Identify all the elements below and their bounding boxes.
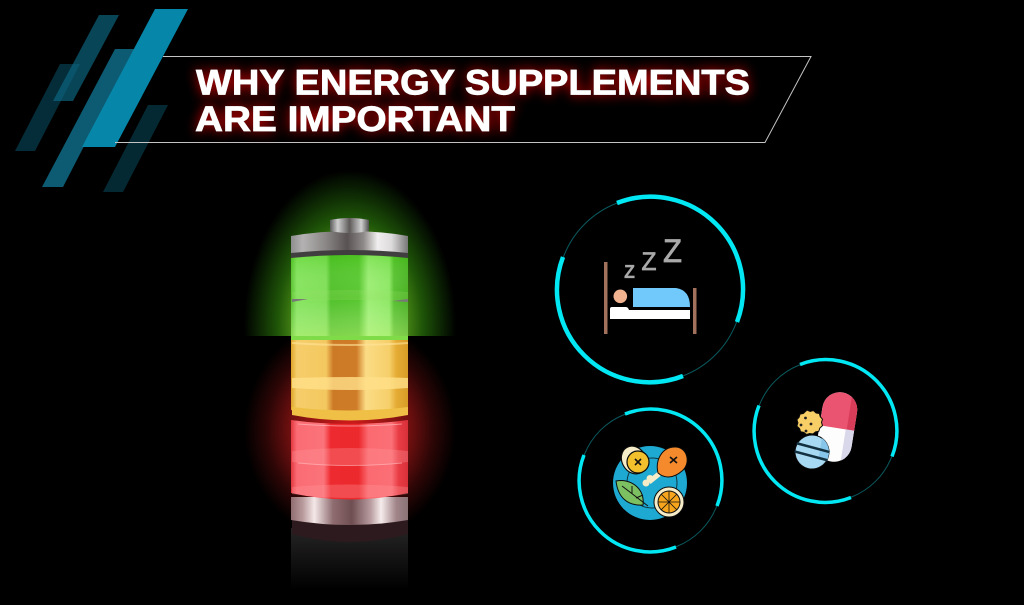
title frame xyxy=(115,56,811,142)
icon: sleeping person in bed: Z xyxy=(624,262,635,282)
battery dark base xyxy=(292,520,408,542)
icon: sleeping person in bed: Z xyxy=(663,233,682,269)
battery xyxy=(291,218,408,590)
battery metal lid xyxy=(291,231,408,256)
title xyxy=(195,64,750,139)
title: WHY ENERGY SUPPLEMENTS xyxy=(196,64,750,102)
supplements icon group xyxy=(754,360,897,502)
title: ARE IMPORTANT xyxy=(195,100,515,139)
food icon group xyxy=(579,409,722,552)
battery yellow section xyxy=(291,340,408,420)
decorative slanted stripes xyxy=(15,9,188,192)
battery silver base xyxy=(291,497,408,525)
icon: sleeping person in bed xyxy=(604,233,696,334)
ring: sleep xyxy=(557,197,743,382)
ring: food xyxy=(579,409,722,552)
battery glow xyxy=(240,165,460,544)
icon: healthy food plate xyxy=(613,441,687,520)
battery green section xyxy=(291,255,408,340)
battery reflection xyxy=(291,528,408,590)
sleep icon group xyxy=(557,197,743,382)
icon: sleeping person in bed: Z xyxy=(642,248,656,276)
battery terminal cap xyxy=(330,218,369,233)
icon: pills and capsule xyxy=(794,392,858,470)
battery red section xyxy=(291,420,408,500)
ring: supplements xyxy=(754,360,897,502)
